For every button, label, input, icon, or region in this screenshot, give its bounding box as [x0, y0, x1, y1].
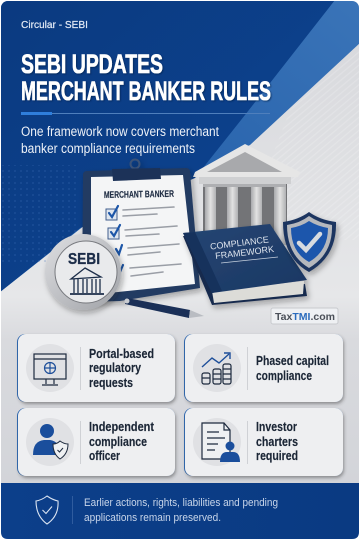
- illustration: compliance framework book: [183, 224, 307, 305]
- badge: TaxTMI.com: TaxTMI.com: [275, 312, 335, 323]
- card text: charters: [256, 435, 298, 449]
- icon: document with person: [202, 423, 240, 462]
- illustration: clipboard checklist: [82, 160, 200, 302]
- icon: officer with shield: [33, 424, 68, 459]
- card text: [89, 347, 154, 390]
- icon: footer shield: [36, 496, 58, 524]
- title: SEBI UPDATES: [21, 49, 163, 79]
- footer text: applications remain preserved.: [84, 512, 221, 524]
- subtitle: One framework now covers merchant: [21, 124, 219, 139]
- card: independent compliance officer: [17, 408, 175, 476]
- footer band: [1, 483, 359, 539]
- card text: compliance: [89, 435, 147, 449]
- card text: required: [256, 449, 298, 463]
- illustration: SEBI coin: [45, 234, 121, 310]
- card text: requests: [89, 376, 133, 390]
- clipboard heading: MERCHANT BANKER: [104, 189, 174, 201]
- illustration: shield with check: [283, 212, 336, 272]
- footer text: Earlier actions, rights, liabilities and pending: [84, 497, 278, 509]
- card text: regulatory: [89, 361, 141, 375]
- book title: FRAMEWORK: [215, 244, 274, 261]
- card text: Independent: [89, 420, 155, 434]
- subtitle: banker compliance requirements: [21, 141, 195, 156]
- card: portal-based regulatory requests: [17, 334, 175, 402]
- card text: Phased capital: [256, 354, 329, 368]
- card text: compliance: [256, 369, 312, 383]
- coin label: SEBI: [68, 251, 100, 268]
- illustration: pen: [124, 298, 204, 318]
- title rule: [21, 112, 270, 115]
- coin bank icon: [70, 268, 104, 294]
- title: [21, 49, 271, 106]
- checklist items: [106, 206, 181, 276]
- subtitle: [21, 124, 219, 156]
- icon: browser monitor with globe: [34, 354, 66, 385]
- badge: TaxTMI.com: [271, 308, 338, 324]
- card text: Portal-based: [89, 347, 154, 361]
- card text: [256, 354, 329, 383]
- clipboard clip: [112, 160, 161, 181]
- card text: officer: [89, 449, 120, 463]
- book title: [210, 234, 274, 262]
- card text: Investor: [256, 420, 297, 434]
- card: phased capital compliance: [184, 334, 343, 402]
- illustration: bank building: [193, 144, 300, 245]
- card text: [89, 420, 155, 463]
- card: investor charters required: [184, 408, 343, 476]
- icon: coins with rising arrow: [202, 353, 231, 384]
- book title: COMPLIANCE: [210, 234, 269, 252]
- footer text: [84, 497, 278, 524]
- label: Circular - SEBI: Circular - SEBI: [21, 19, 88, 31]
- card text: [256, 420, 298, 463]
